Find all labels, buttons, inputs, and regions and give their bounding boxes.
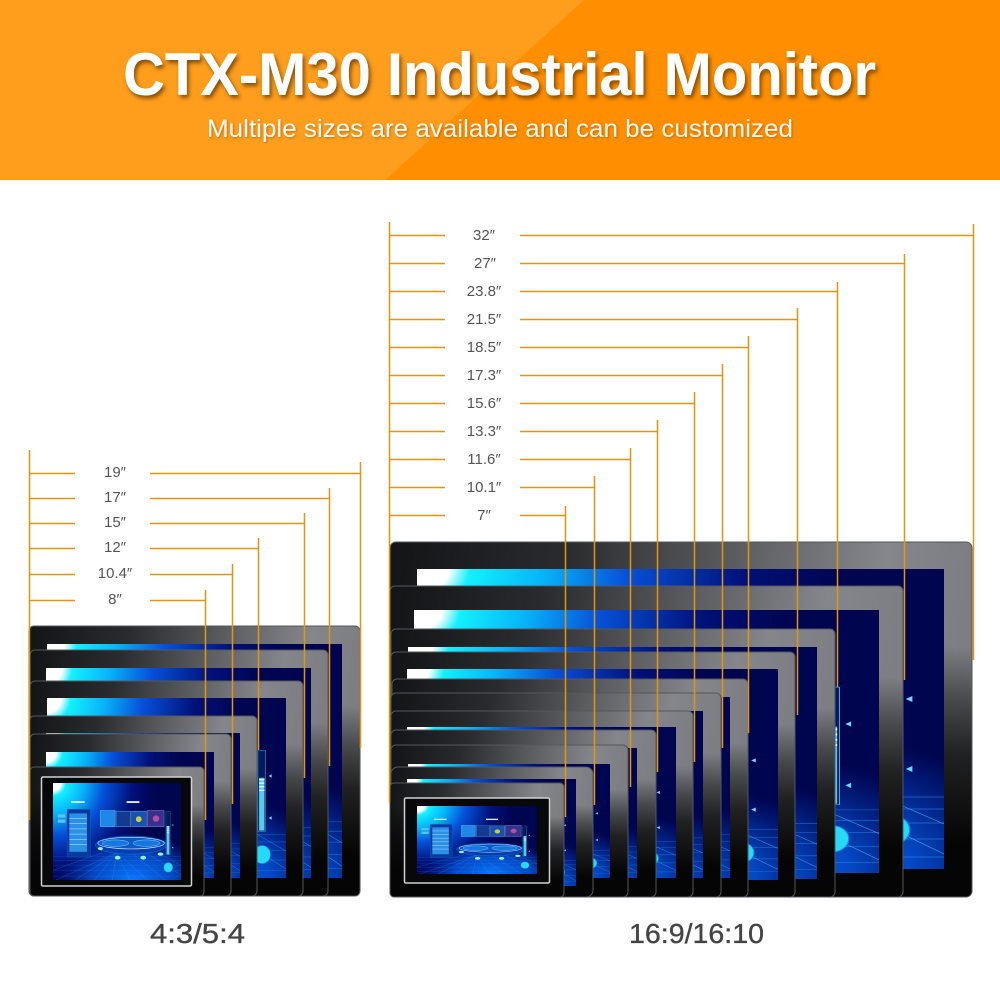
size labels, 4:3 group: 8″ <box>108 591 123 608</box>
size labels, 16:9 group: 17.3″ <box>467 367 502 384</box>
header banner <box>0 0 1000 180</box>
size labels, 16:9 group: 21.5″ <box>467 311 502 328</box>
size guide lines, 4:3 group <box>29 450 360 820</box>
size labels, 4:3 group: 15″ <box>104 514 127 531</box>
monitor 21.5 inch <box>391 652 795 897</box>
monitor 17 inch <box>30 650 328 896</box>
subtitle: Multiple sizes are available and can be customized <box>207 115 793 143</box>
size labels, 16:9 group: 18.5″ <box>467 339 502 356</box>
monitor 15 inch <box>30 681 303 896</box>
panel: 16:9 and 16:10 monitor stack <box>389 222 974 897</box>
monitor 15.6 inch <box>391 711 693 897</box>
size labels, 4:3 group: 19″ <box>104 464 127 481</box>
monitor 23.8 inch <box>391 629 835 897</box>
monitor 11.6 inch <box>391 745 628 897</box>
size labels, 16:9 group: 7″ <box>477 507 492 524</box>
monitor 13.3 inch <box>391 730 656 897</box>
size labels, 16:9 group: 10.1″ <box>467 479 502 496</box>
size guide lines, 16:9 group <box>389 222 974 817</box>
monitor 27 inch <box>390 586 903 897</box>
monitor 32 inch <box>390 542 972 897</box>
monitor 7 inch <box>390 783 564 897</box>
monitor 19 inch <box>29 626 360 896</box>
monitor 10.1 inch <box>391 767 593 897</box>
caption: 16:9/16:10: 16:9/16:10 <box>629 918 764 949</box>
size labels, 4:3 group: 10.4″ <box>98 565 133 582</box>
monitor 12 inch <box>29 716 257 896</box>
size labels, 16:9 group: 32″ <box>473 227 496 244</box>
size labels, 4:3 group: 12″ <box>104 539 127 556</box>
monitor 8 inch <box>30 767 204 896</box>
size labels, 16:9 group: 15.6″ <box>467 395 502 412</box>
size labels, 16:9 group: 13.3″ <box>467 423 502 440</box>
size labels, 16:9 group <box>467 227 502 524</box>
monitor 10.4 inch <box>30 734 231 896</box>
size labels, 16:9 group: 11.6″ <box>467 451 501 468</box>
monitor 17.3 inch <box>391 693 721 897</box>
size labels, 4:3 group: 17″ <box>104 489 127 506</box>
size labels, 16:9 group: 23.8″ <box>467 283 502 300</box>
caption: 4:3/5:4: 4:3/5:4 <box>150 918 245 949</box>
size labels, 4:3 group <box>98 464 133 608</box>
monitor 18.5 inch <box>392 679 748 897</box>
panel: 4:3 and 5:4 monitor stack <box>29 450 360 896</box>
title: CTX-M30 Industrial Monitor <box>123 41 876 108</box>
size labels, 16:9 group: 27″ <box>474 255 497 272</box>
